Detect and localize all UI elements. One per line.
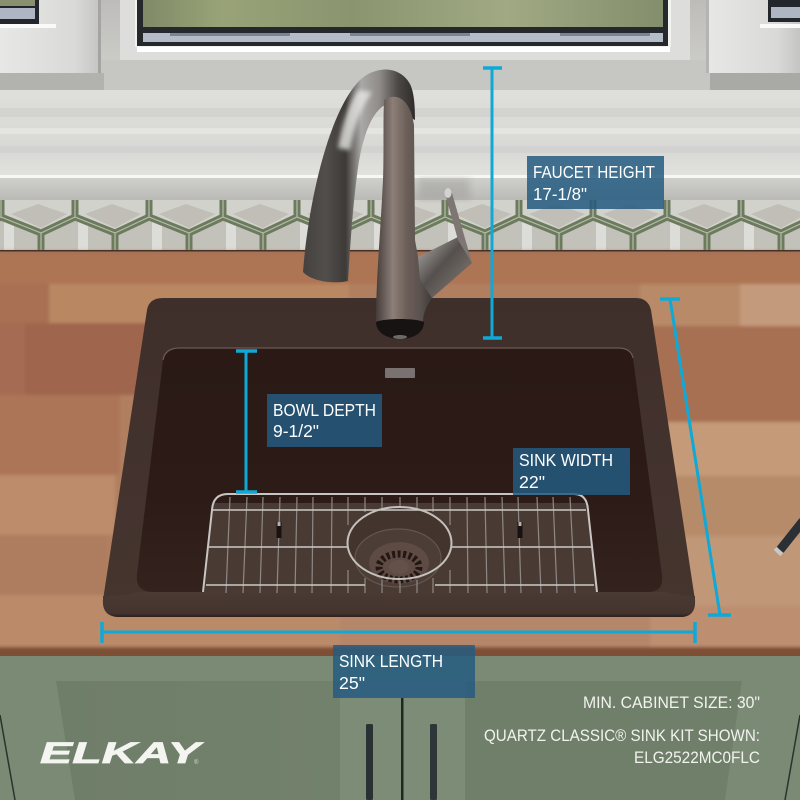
cabinets <box>0 656 800 800</box>
callout: sink width: 22" <box>519 472 545 492</box>
drain strainer <box>348 508 450 587</box>
dimension: sink width <box>660 299 731 615</box>
text: sink kit model: ELG2522MC0FLC <box>634 749 760 767</box>
tile backsplash <box>0 200 800 250</box>
bowl inner edge <box>163 348 633 360</box>
faucet <box>303 70 472 339</box>
sink <box>103 298 695 617</box>
logo: Elkay <box>40 737 205 770</box>
logo: Elkay: ® <box>194 759 199 766</box>
sink deck <box>103 298 695 617</box>
center door stiles <box>340 681 465 800</box>
butcher block countertop <box>0 250 800 661</box>
text: sink kit model: QUARTZ CLASSIC® SINK KIT SHOWN: <box>484 727 760 745</box>
callout: faucet height <box>527 156 664 209</box>
text: minimum cabinet size: MIN. CABINET SIZE: 30" <box>583 694 760 712</box>
door gap <box>401 698 404 800</box>
sprayer tool at right edge <box>777 521 800 553</box>
left door panel <box>56 681 340 800</box>
callout: sink length <box>333 645 475 698</box>
logo plate <box>385 368 415 378</box>
callout: sink length: SINK LENGTH <box>339 651 443 671</box>
callout: sink length: 25" <box>339 673 365 693</box>
logo: Elkay: ELKAY <box>40 737 205 770</box>
right door panel <box>465 681 742 800</box>
faucet spout <box>303 70 415 282</box>
callout: bowl depth: 9-1/2" <box>273 421 319 441</box>
bowl <box>137 348 662 592</box>
faucet handle <box>418 237 472 298</box>
dimension: bowl depth <box>236 351 257 492</box>
rack floor tint <box>204 503 597 592</box>
callout: bowl depth <box>267 394 382 447</box>
callout: sink width: SINK WIDTH <box>519 450 613 470</box>
window: right sash <box>706 0 800 90</box>
wall background <box>0 0 800 200</box>
text: sink kit model <box>484 727 760 767</box>
callout: faucet height: 17-1/8" <box>533 184 587 204</box>
faucet column <box>376 97 432 322</box>
callout: bowl depth: BOWL DEPTH <box>273 400 376 420</box>
front lip <box>103 592 695 617</box>
callout: faucet height: FAUCET HEIGHT <box>533 162 655 182</box>
dimension: faucet height <box>483 68 502 338</box>
faucet base <box>376 319 424 339</box>
window: left sash <box>0 0 104 90</box>
bottom grid rack <box>203 494 597 593</box>
handle right <box>430 724 437 800</box>
callout: sink width <box>513 448 630 495</box>
faucet shadow <box>418 178 470 200</box>
faucet lever <box>445 193 472 263</box>
dimension: sink length <box>102 622 695 643</box>
cabinet edges <box>0 715 800 800</box>
spout highlight <box>338 90 372 150</box>
window: center <box>120 0 690 60</box>
handle left <box>366 724 373 800</box>
